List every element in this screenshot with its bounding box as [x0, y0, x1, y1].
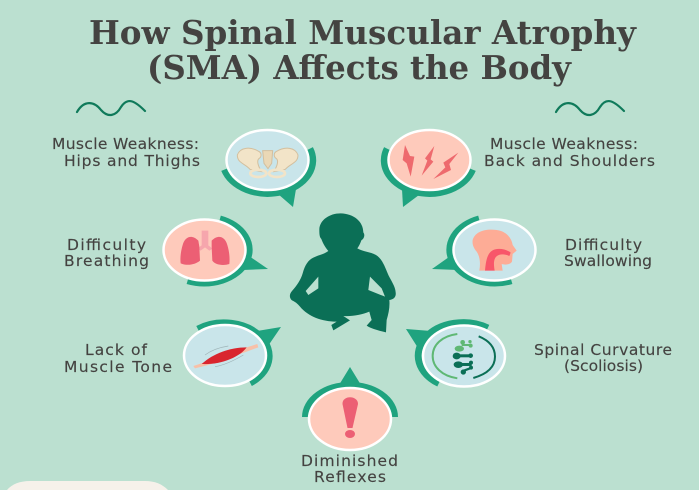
callout: back and shoulders [384, 130, 655, 207]
callout tail [257, 327, 281, 346]
callout ring [384, 149, 472, 193]
baby silhouette [290, 213, 396, 332]
callout: hips and thighs [52, 130, 313, 207]
label [484, 135, 655, 170]
callout: diminished reflexes [301, 367, 398, 486]
icon: throat profile [454, 220, 536, 280]
label: Difficulty [67, 236, 146, 254]
bottom-left cream panel [7, 481, 168, 490]
label: Muscle Tone [64, 358, 172, 376]
title [89, 13, 637, 87]
callout tail [432, 257, 458, 270]
callout: spinal curvature [406, 323, 672, 386]
title: (SMA) Affects the Body [147, 48, 572, 87]
label: Swallowing [564, 252, 652, 270]
label: Breathing [64, 252, 149, 270]
icon: spine [423, 326, 505, 386]
label: Hips and Thighs [64, 152, 200, 170]
label [64, 236, 149, 270]
icon: muscle [184, 325, 266, 386]
squiggle right [556, 101, 624, 115]
callout tail [402, 189, 419, 207]
icon: lungs [164, 220, 246, 280]
label: (Scoliosis) [564, 357, 643, 375]
label [52, 135, 200, 170]
label [64, 341, 172, 376]
callout ring [450, 219, 511, 283]
icon: pelvis [226, 130, 308, 190]
label [534, 341, 672, 375]
label: Difficulty [565, 236, 642, 254]
callout tail [339, 367, 361, 385]
callout ring [306, 386, 394, 417]
callout tail [406, 329, 431, 348]
icon: pain bolts [388, 130, 470, 190]
label: Lack of [85, 341, 148, 359]
label: Reflexes [314, 468, 386, 486]
label: Muscle Weakness: [52, 135, 199, 153]
callout tail [243, 256, 268, 270]
icon: exclamation mark [309, 388, 391, 450]
label [301, 452, 398, 486]
label: Muscle Weakness: [490, 135, 638, 153]
callout: difficulty swallowing [432, 219, 652, 283]
title: How Spinal Muscular Atrophy [89, 13, 637, 52]
callout: difficulty breathing [64, 219, 268, 283]
callout ring [418, 323, 488, 383]
label: Spinal Curvature [534, 341, 672, 359]
callout ring [188, 219, 249, 283]
callout tail [278, 189, 296, 207]
squiggle left [77, 101, 145, 115]
callout ring [198, 323, 269, 383]
label: Diminished [301, 452, 398, 470]
label [564, 236, 652, 270]
callout: lack of muscle tone [64, 323, 281, 386]
label: Back and Shoulders [484, 152, 655, 170]
callout ring [224, 149, 313, 193]
